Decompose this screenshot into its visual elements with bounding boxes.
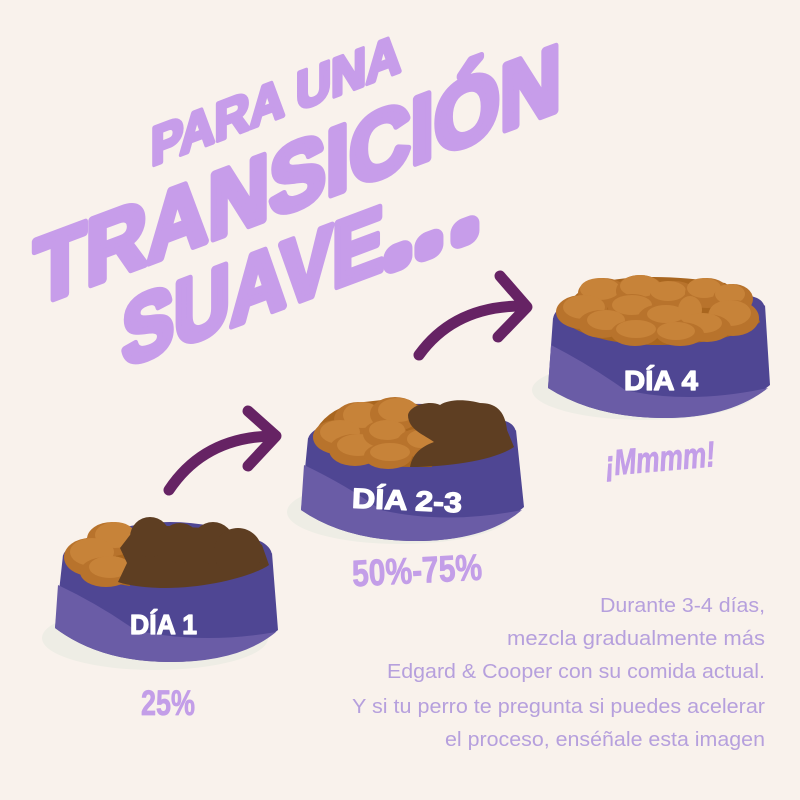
wet food — [408, 400, 514, 467]
title line: SUAVE...: ... — [391, 188, 472, 274]
percentage: 50%-75%: 50%-75% — [351, 547, 483, 594]
title line: PARA UNA: PARA UNA — [151, 22, 401, 178]
exclamation: ¡Mmmm!: ¡Mmmm! — [603, 433, 717, 484]
text block: instructions: Edgard & Cooper con su comida actual. — [387, 661, 765, 683]
day label: DÍA 2-3 — [351, 483, 463, 518]
arrow: day 2 to day 4 — [419, 276, 527, 355]
arrow: day 1 to day 2 — [169, 411, 276, 490]
text block: instructions: Y si tu perro te pregunta si puedes acelerar — [352, 696, 765, 718]
title — [34, 22, 561, 387]
bowl: day 1 — [42, 517, 278, 670]
title line: SUAVE...: SUAVE — [122, 187, 384, 387]
bowl: day 2-3 — [287, 397, 524, 544]
text block: instructions: Durante 3-4 días, — [600, 595, 765, 617]
text block: instructions: mezcla gradualmente más — [507, 628, 765, 650]
wet food — [118, 517, 269, 588]
percentage: 25%: 25% — [141, 684, 195, 723]
kibble — [313, 397, 437, 469]
text block: instructions — [352, 595, 765, 751]
day label: DÍA 4 — [624, 365, 698, 396]
kibble — [556, 275, 760, 346]
day label: DÍA 1 — [130, 609, 197, 640]
text block: instructions: el proceso, enséñale esta imagen — [445, 729, 765, 751]
title line: TRANSICIÓN: TRANSICIÓN — [34, 24, 561, 326]
bowl: day 4 — [532, 275, 770, 420]
kibble — [64, 522, 137, 587]
